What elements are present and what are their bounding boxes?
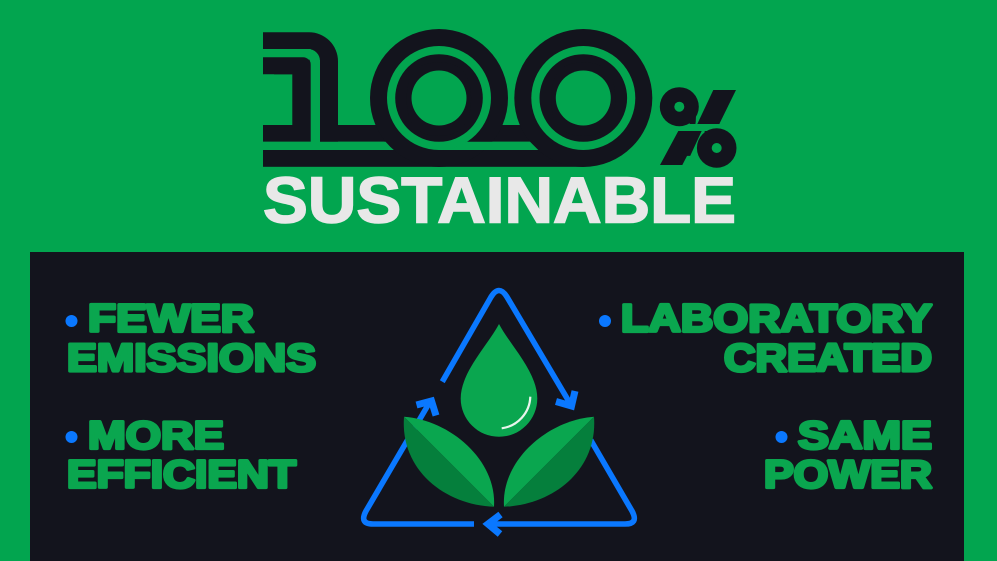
bullet: fewer emissions [66, 298, 316, 380]
bullet: laboratory created: CREATED [724, 337, 932, 380]
title: 100%: 1 [266, 35, 332, 167]
icon: water drop [461, 324, 537, 437]
title: 100%: 0 [401, 41, 477, 157]
bullet: more efficient: EFFICIENT [67, 454, 296, 496]
icon: recycling triangle with drop and leaves [364, 290, 634, 534]
bullet: laboratory created [599, 298, 932, 380]
bullet: same power: POWER [764, 454, 932, 496]
bullet: laboratory created: LABORATORY [621, 298, 932, 340]
bullet: same power [764, 414, 932, 496]
bullet: fewer emissions: FEWER [88, 298, 254, 340]
bullet: more efficient [66, 414, 296, 496]
title: 100%: 0 [546, 41, 621, 157]
icon: left leaf [404, 417, 494, 507]
bullet: more efficient: MORE [88, 414, 224, 458]
title: 100%: % [675, 83, 725, 173]
title: 100% [263, 29, 736, 173]
icon: blue recycling arrows [364, 290, 634, 534]
bullet: same power: SAME [798, 414, 932, 458]
title: SUSTAINABLE: SUSTAINABLE [263, 164, 736, 236]
panel: dark lower background [30, 252, 964, 561]
icon: right leaf [504, 417, 594, 507]
bullet: fewer emissions: EMISSIONS [67, 337, 316, 380]
